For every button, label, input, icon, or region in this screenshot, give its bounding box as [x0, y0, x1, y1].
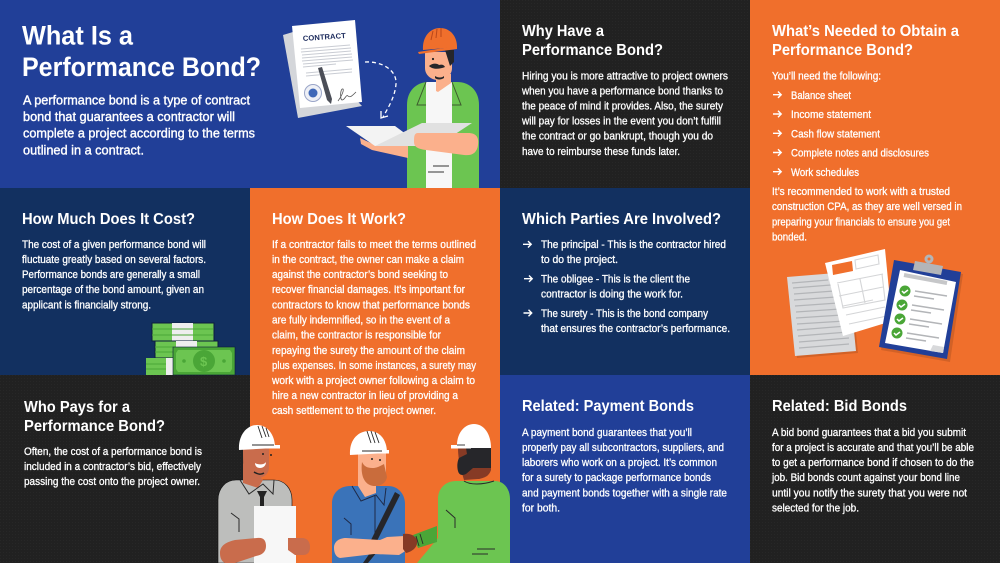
worker 3 [403, 424, 510, 563]
title: What Is a [22, 20, 134, 50]
icon: contract document [283, 20, 362, 118]
text block: to get a performance bond if chosen to do the [772, 457, 974, 469]
text block: selected for the job. [772, 502, 859, 514]
text block: included in a contractor’s bid, effectively [24, 461, 201, 473]
text block: definition: bond that guarantees a contractor will [23, 109, 235, 124]
heading: Related: Bid Bonds [772, 398, 907, 415]
panel: who pays for a performance bond [0, 375, 250, 563]
text block: The cost of a given performance bond will [22, 239, 206, 251]
worker 1 [218, 425, 310, 563]
text block: in the contract, the owner can make a claim [272, 254, 464, 266]
grey sheet [789, 274, 858, 358]
icon: stacks of money: $ [200, 354, 208, 369]
text block: against the contractor’s bond seeking to [272, 269, 448, 281]
text block: until you notify the surety that you were not [772, 488, 968, 500]
panel: how does it work [250, 188, 500, 563]
text block: Performance bonds are generally a small [22, 269, 200, 281]
text block: recover financial damages. It’s important for [272, 284, 465, 296]
heading: Related: Payment Bonds [522, 398, 694, 415]
panel: which parties are involved [500, 188, 750, 375]
text block: claim, the contractor is responsible for [272, 330, 441, 342]
list of parties: contractor is doing the work for. [541, 288, 683, 300]
text block: are fully indemnified, so in the event of a [272, 314, 451, 326]
text block: plus expenses. In some instances, a surety may [272, 360, 476, 372]
worker 2 [332, 431, 407, 563]
text block: definition: complete a project according to the terms [23, 126, 255, 140]
heading: What’s Needed to Obtain a [772, 23, 959, 40]
text block: cash settlement to the project owner. [272, 405, 436, 417]
hard hat [423, 28, 457, 50]
heading: Who Pays for a [24, 399, 130, 416]
left hand [360, 138, 408, 158]
text block: and payment bonds together with a single rate [522, 488, 727, 500]
illustration: three construction workers [218, 424, 510, 563]
recommendation text [772, 186, 962, 244]
text block: definition: outlined in a contract. [23, 142, 144, 158]
text block: work with a project owner following a claim to [271, 375, 475, 387]
panel: how much does it cost [0, 188, 250, 375]
text block: applicant is financially strong. [22, 300, 151, 312]
title: Performance Bond? [22, 52, 261, 82]
text block [771, 427, 974, 514]
text block: fluctuate greatly based on several factors. [22, 254, 206, 266]
text block: percentage of the bond amount, given an [22, 284, 204, 296]
text block [271, 239, 476, 417]
list of parties: The principal - This is the contractor hired [541, 239, 726, 251]
list of required documents [773, 90, 929, 179]
list of required documents: Cash flow statement [791, 128, 881, 140]
text block: for a project is accurate and that you’ll be able [772, 442, 974, 454]
text block: A payment bond guarantees that you’ll [522, 427, 692, 439]
text block: laborers who work on a project. It’s common [522, 457, 717, 469]
text block: the contract or go bankrupt, though you do [522, 130, 713, 142]
heading [24, 399, 165, 435]
heading: How Much Does It Cost? [22, 211, 195, 228]
illustration: contractor holding plans [346, 28, 479, 188]
list of parties [523, 239, 730, 335]
form sheet [825, 249, 892, 336]
recommendation text: bonded. [772, 232, 807, 244]
jacket [407, 82, 479, 188]
heading: Why Have a [522, 23, 604, 40]
text block: have to reimburse these funds later. [522, 146, 680, 158]
list of required documents: Balance sheet [791, 90, 852, 102]
text block [24, 446, 202, 488]
text block: definition: A performance bond is a type of contract [23, 92, 250, 108]
text block: A bid bond guarantees that a bid you submit [772, 427, 967, 439]
list of required documents: Complete notes and disclosures [791, 148, 929, 160]
text block: job. Bid bonds count against your bond line [771, 472, 960, 484]
text block: Often, the cost of a performance bond is [24, 446, 202, 458]
recommendation text: It’s recommended to work with a trusted [772, 186, 950, 198]
text block: definition [23, 92, 255, 158]
text block: Hiring you is more attractive to project owners [522, 70, 728, 82]
list of required documents: Income statement [791, 109, 872, 121]
text block [22, 239, 206, 312]
recommendation text: construction CPA, as they are well versed in [772, 201, 962, 213]
recommendation text: preparing your financials to ensure you get [772, 216, 951, 228]
text block: for a surety to package performance bonds [522, 472, 711, 484]
heading: Performance Bond? [772, 42, 913, 59]
panel: why have a performance bond [500, 0, 750, 188]
text block: when you have a performance bond thanks to [521, 86, 723, 98]
text block [521, 70, 728, 158]
text block: contractors to know that performance bonds [272, 300, 470, 312]
heading: Which Parties Are Involved? [522, 211, 721, 228]
list of required documents: Work schedules [791, 167, 859, 179]
text block: repaying the surety the amount of the claim [272, 345, 465, 357]
clipboard [881, 262, 963, 362]
list of parties: to do the project. [541, 254, 618, 266]
plans [346, 126, 422, 146]
shirt [426, 82, 452, 188]
list of parties: that ensures the contractor’s performance. [541, 323, 730, 335]
panel: what's needed to obtain a performance bond [750, 0, 1000, 375]
text block: passing the cost onto the project owner. [24, 476, 200, 488]
heading: Performance Bond? [24, 418, 165, 435]
intro text: You’ll need the following: [772, 70, 881, 82]
pocket lines [428, 166, 449, 172]
text block: will pay for losses in the event you don’t fulfill [521, 116, 721, 128]
text block: hire a new contractor in lieu of providing a [272, 390, 459, 402]
heading: Performance Bond? [522, 42, 663, 59]
icon: contract document: CONTRACT [303, 31, 346, 43]
neck and face [436, 74, 451, 92]
text block [522, 427, 727, 514]
title [22, 20, 261, 82]
arrow: dashed curve from contract to plans [365, 62, 396, 118]
heading [772, 23, 959, 59]
icon: financial documents and clipboard [787, 249, 963, 362]
text block: the peace of mind it provides. Also, the surety [522, 100, 723, 112]
panel: what is a performance bond [0, 0, 500, 188]
list of parties: The obligee - This is the client the [541, 274, 690, 286]
heading [522, 23, 663, 59]
icon: stacks of money [146, 323, 235, 375]
panel: related payment bonds [500, 375, 750, 563]
heading: How Does It Work? [272, 211, 406, 228]
panel: related bid bonds [750, 375, 1000, 563]
text block: If a contractor fails to meet the terms outlined [272, 239, 476, 251]
list of parties: The surety - This is the bond company [541, 308, 708, 320]
text block: properly pay all subcontractors, suppliers, and [522, 442, 724, 454]
right arm [414, 133, 478, 155]
text block: for both. [522, 502, 560, 514]
